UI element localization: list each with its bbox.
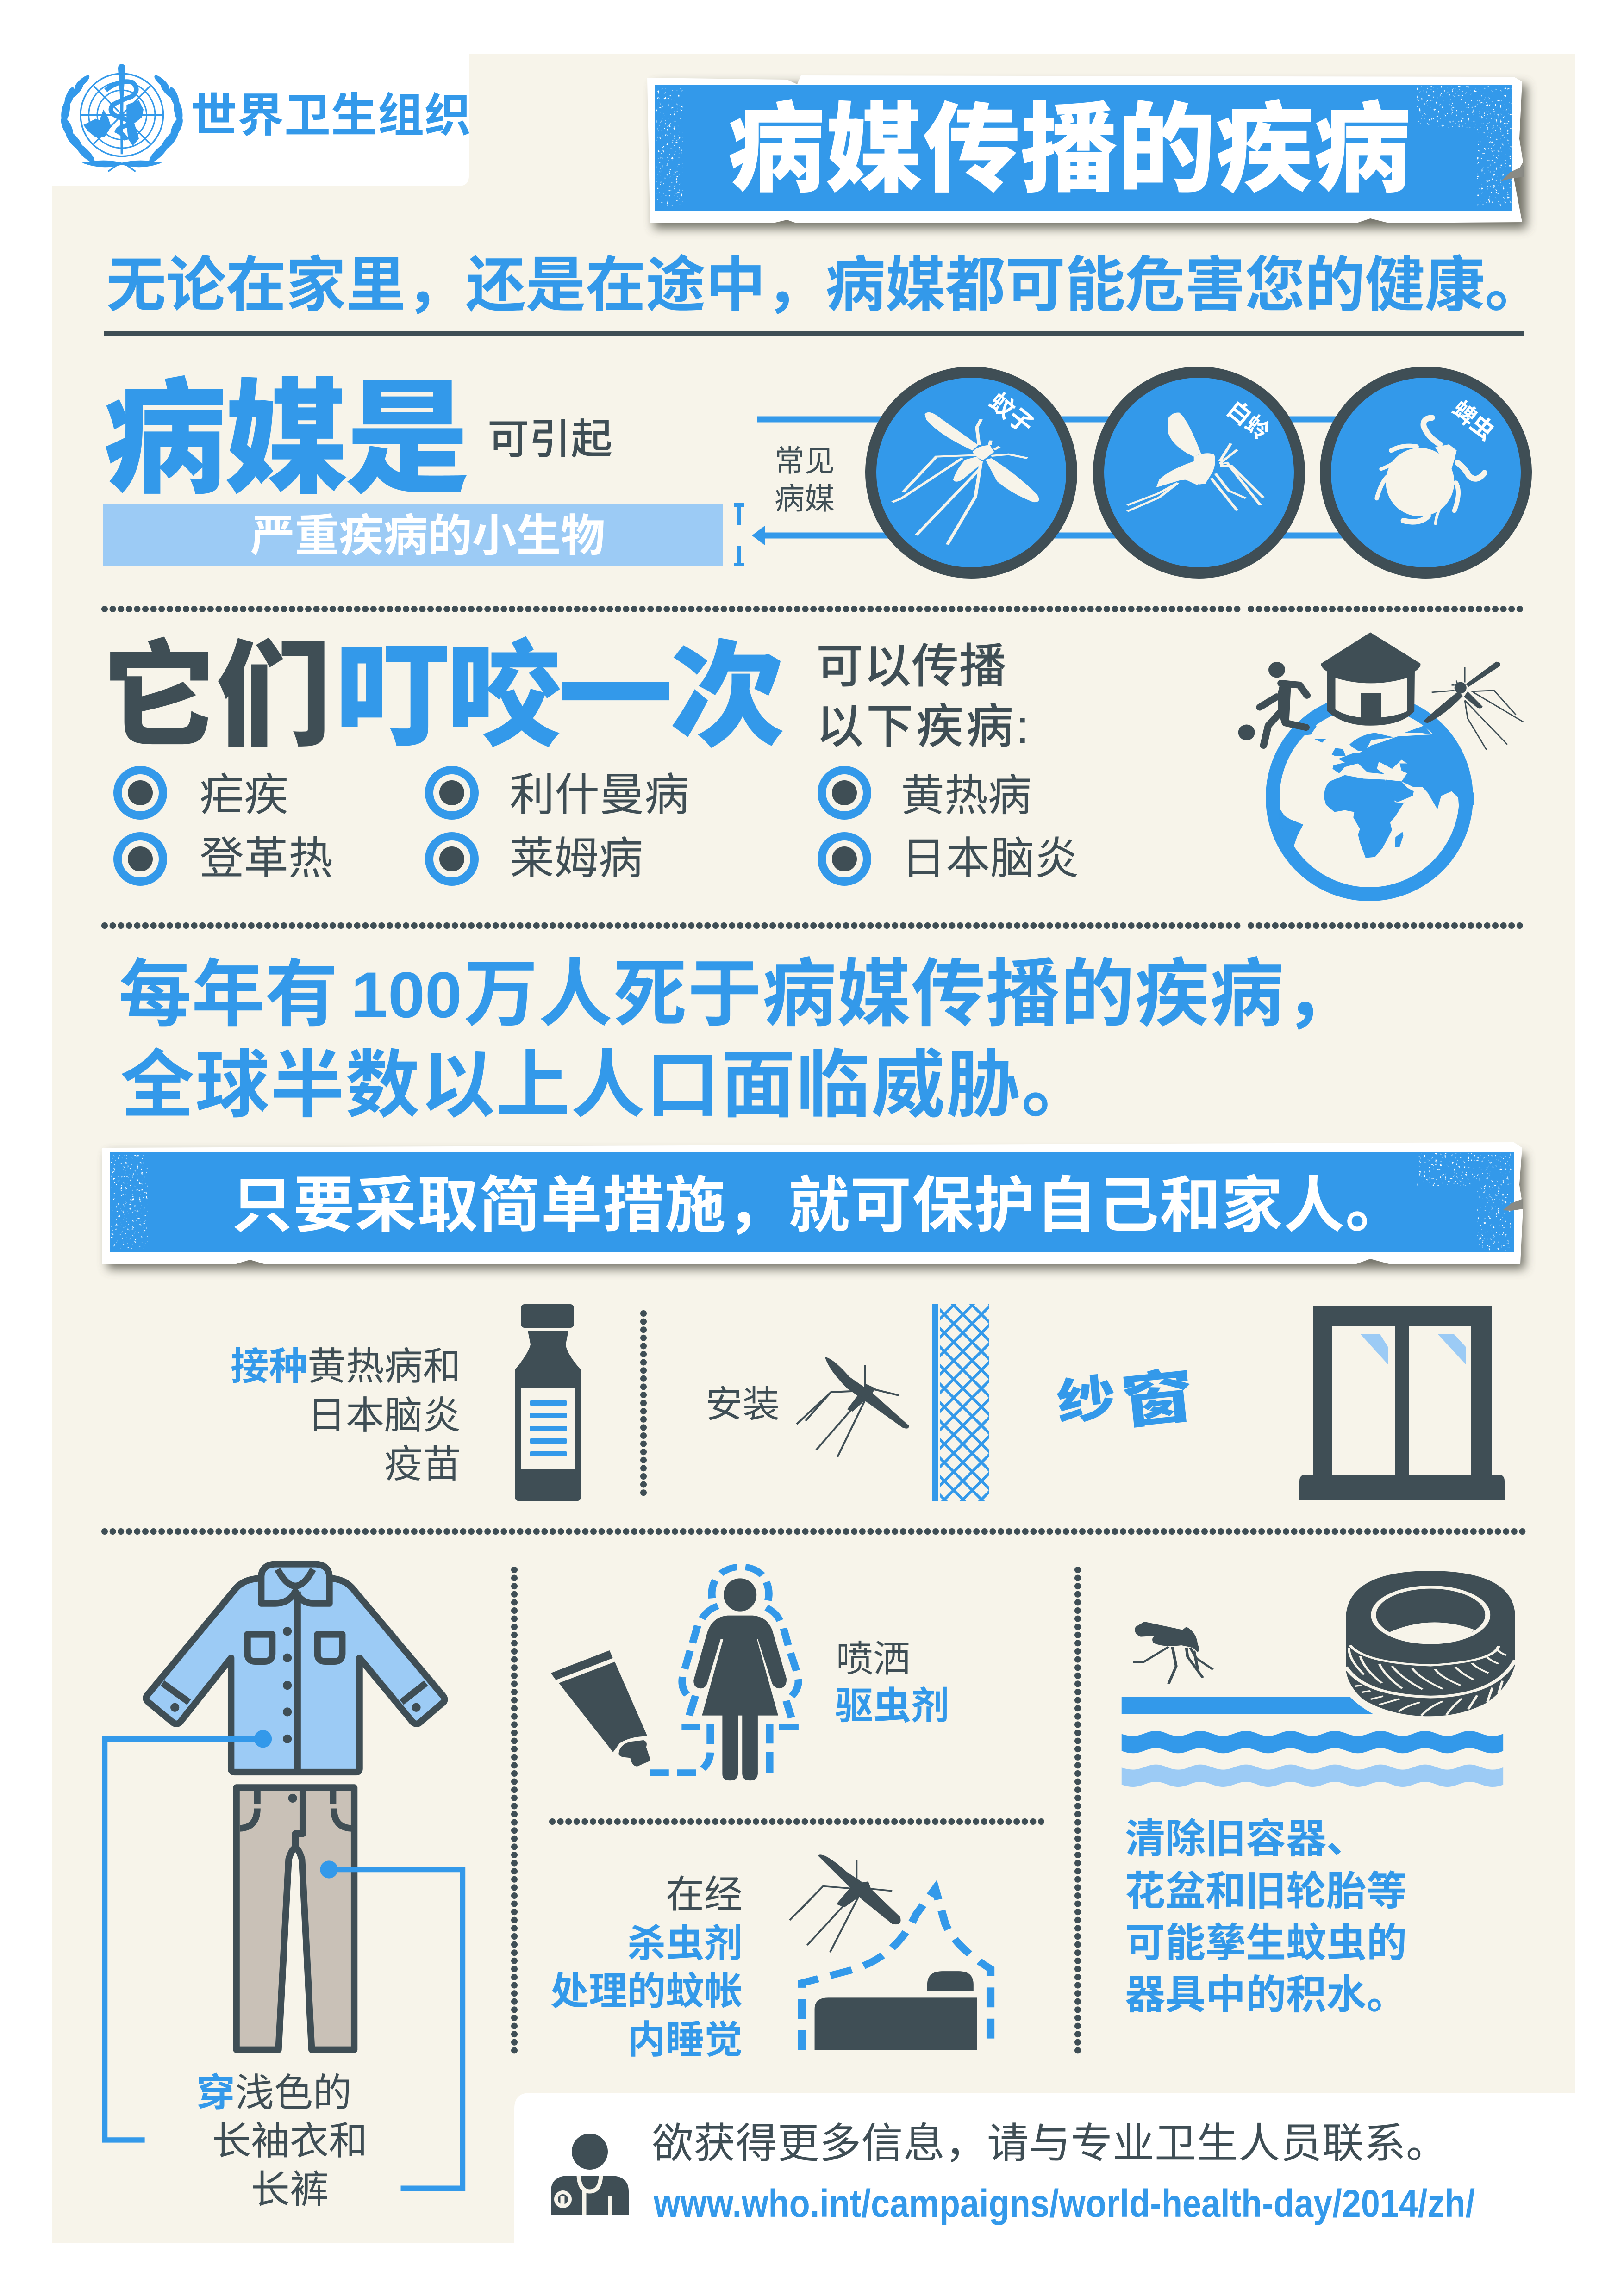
label: common vectors	[775, 444, 835, 516]
text: window screens: 纱	[1054, 1370, 1118, 1430]
runner	[1238, 662, 1307, 746]
text: remove stagnant water: 可能孳生蚊虫的	[1125, 1921, 1407, 1966]
icon: woman	[693, 1578, 787, 1780]
icon: tyre	[1346, 1571, 1515, 1716]
vaccine text: 疫苗	[384, 1443, 461, 1486]
icon: tick circle: 蜱虫	[1447, 396, 1499, 445]
text: can transmit: 可以传播	[816, 640, 1006, 693]
dotted divider	[105, 922, 1524, 929]
bar: small organisms	[103, 504, 723, 566]
divider rule	[104, 331, 1524, 336]
statement: one million deaths: 每年有	[119, 954, 338, 1035]
net dashed outline	[802, 1889, 991, 2050]
icon: repellent tube	[551, 1650, 650, 1767]
icon: globe with house, runner and mosquito	[1238, 632, 1524, 894]
banner text: 只要采取简单措施，就可保护自己和家人。	[231, 1171, 1406, 1239]
disease list	[118, 770, 1079, 884]
icon: mosquito over net	[790, 1854, 901, 1952]
label: common vectors: 常见	[775, 444, 835, 478]
organization name: 世界卫生组织	[191, 90, 471, 142]
panel: bed net	[550, 1854, 991, 2061]
item: yellow fever	[822, 770, 1031, 820]
callout lines	[105, 1739, 462, 2188]
vaccine text: 接种黄热病和	[231, 1345, 461, 1388]
statement: one million deaths	[119, 952, 1358, 1126]
heading: one bite	[102, 632, 1029, 760]
statement: one million deaths: 全球半数以上人口面临威胁。	[120, 1044, 1095, 1126]
icon: sandfly circle	[1099, 372, 1299, 573]
statement: one million deaths: 万人死于病媒传播的疾病，	[464, 952, 1358, 1035]
arrow diagram: common vectors	[734, 372, 1526, 573]
panel: standing water	[1122, 1571, 1515, 2017]
icon: window	[1299, 1306, 1505, 1500]
dotted divider	[105, 606, 1524, 612]
protection banner	[102, 1142, 1525, 1269]
text: window screens: 窗	[1118, 1363, 1197, 1436]
clothing text: 浅色的	[235, 2071, 352, 2115]
text: remove stagnant water	[1125, 1817, 1407, 2017]
icon: mosquito circle: 蚊子	[984, 388, 1038, 439]
item: malaria: 疟疾	[200, 771, 288, 820]
icon: WHO emblem	[58, 64, 185, 172]
text: sleep under net: 在经	[666, 1873, 743, 1916]
text: can cause: 可引起	[487, 417, 612, 463]
item: leishmaniasis	[429, 770, 689, 820]
trousers	[237, 1787, 354, 2050]
water bar	[1122, 1697, 1373, 1714]
horizontal divider	[552, 1818, 1042, 1825]
icon: tick circle	[1325, 372, 1526, 573]
icon: health worker	[551, 2134, 629, 2215]
text: remove stagnant water: 花盆和旧轮胎等	[1125, 1869, 1407, 1914]
icon: sandfly circle: 白蛉	[1222, 396, 1274, 445]
continents	[1279, 720, 1474, 858]
WHO logo	[58, 64, 471, 172]
vertical divider	[1074, 1570, 1081, 2058]
clothing text: 穿	[196, 2071, 235, 2115]
statement: one million deaths: 100	[351, 958, 462, 1031]
link: www.who.int/campaigns/world-health-day/2014/zh/	[653, 2182, 1475, 2225]
icon: mosquito on water	[1133, 1622, 1213, 1684]
text: can transmit: 以下疾病:	[816, 700, 1029, 753]
item: japanese encephalitis	[822, 834, 1079, 884]
item: dengue	[118, 834, 333, 884]
item: malaria	[118, 770, 288, 820]
clothing text: 长袖衣和	[212, 2119, 368, 2163]
mosquito	[1424, 662, 1524, 750]
item: yellow fever: 黄热病	[901, 771, 1031, 820]
icon: screen mesh	[935, 1304, 989, 1501]
item: dengue: 登革热	[200, 834, 333, 884]
subtitle: 无论在家里，还是在途中，病媒都可能危害您的健康。	[106, 251, 1545, 319]
text: spray repellent: 驱虫剂	[835, 1685, 949, 1727]
vaccine text: 日本脑炎	[307, 1394, 461, 1437]
clothing text: 长裤	[251, 2168, 329, 2211]
text: more information: 欲获得更多信息，请与专业卫生人员联系。	[652, 2121, 1448, 2167]
label: common vectors: 病媒	[775, 482, 835, 516]
title banner	[647, 75, 1527, 229]
text: spray repellent: 喷洒	[836, 1638, 910, 1680]
text: spray repellent	[835, 1638, 949, 1727]
vertical divider	[640, 1313, 647, 1500]
heading: vectors are	[103, 370, 723, 566]
footer	[551, 2121, 1475, 2225]
water waves	[1122, 1731, 1503, 1753]
icon: bed	[815, 1997, 977, 2050]
repellent dashed outline	[650, 1567, 799, 1773]
text: remove stagnant water: 清除旧容器、	[1125, 1817, 1367, 1861]
text: install: 安装	[706, 1384, 780, 1425]
vertical divider	[511, 1570, 518, 2058]
heading: one bite: 它们	[102, 632, 331, 760]
panel: clothing	[105, 1564, 462, 2211]
item: lyme: 莱姆病	[510, 834, 643, 884]
panel: repellent	[551, 1567, 949, 1780]
heading: vectors are: 病媒是	[103, 370, 469, 509]
house	[1321, 632, 1420, 726]
text: sleep under net: 处理的蚊帐	[550, 1970, 743, 2013]
item: leishmaniasis: 利什曼病	[510, 770, 689, 820]
text: sleep under net: 内睡觉	[627, 2018, 743, 2061]
bar: small organisms: 严重疾病的小生物	[250, 511, 605, 561]
item: japanese encephalitis: 日本脑炎	[901, 834, 1079, 884]
text: window screens	[1054, 1363, 1197, 1436]
icon: mosquito circle	[871, 372, 1072, 573]
text: remove stagnant water: 器具中的积水。	[1125, 1972, 1407, 2017]
icon: vaccine bottle	[515, 1304, 581, 1501]
item: lyme	[429, 834, 643, 884]
shirt	[146, 1564, 444, 1772]
text: sleep under net: 杀虫剂	[627, 1922, 743, 1965]
title: 病媒传播的疾病	[727, 95, 1411, 204]
heading: one bite: 叮咬一次	[335, 632, 785, 760]
dotted divider	[105, 1528, 1524, 1535]
text: can transmit	[816, 640, 1029, 753]
icon: mosquito at screen	[797, 1357, 909, 1457]
